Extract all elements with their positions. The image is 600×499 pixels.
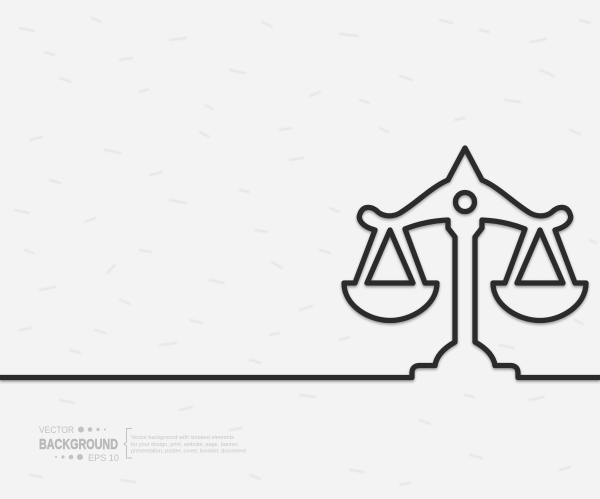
description text: Vector background with isolated elements [131, 435, 234, 441]
word: vector: VECTOR [39, 425, 74, 436]
left pan triangle [367, 230, 413, 283]
lower dots [55, 454, 83, 460]
description text: presentation, poster, cover, booklet, document [131, 448, 246, 454]
word: background: BACKGROUND [39, 436, 118, 453]
scale icon drawn as a continuous line [0, 148, 600, 378]
logo block: vector background [39, 425, 119, 464]
upper dots [78, 426, 106, 432]
pivot circle [456, 192, 474, 212]
bracket [124, 428, 132, 458]
description text [131, 435, 246, 454]
word: eps 10: EPS 10 [88, 453, 119, 464]
right pan triangle [517, 230, 563, 283]
scale icon drop shadow [0, 150, 600, 379]
description text: for your design, print, website, page, banner, [131, 442, 239, 448]
baseline and scale outline [0, 148, 600, 378]
